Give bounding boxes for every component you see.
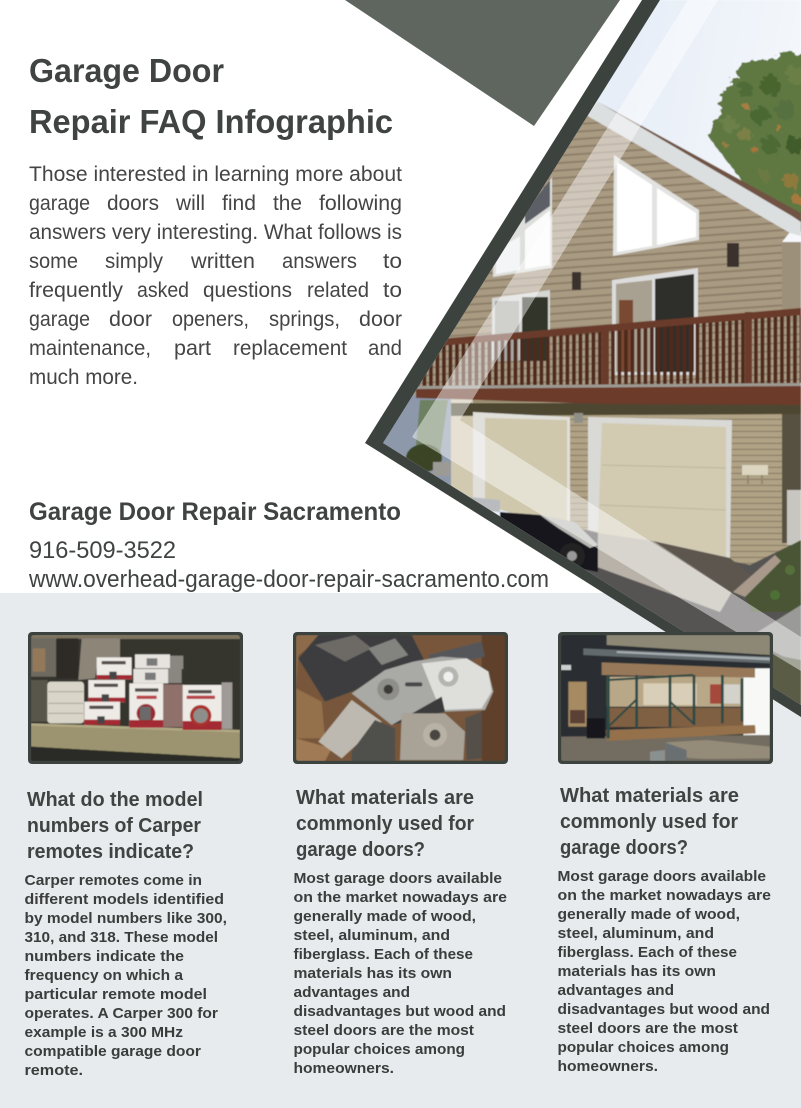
column 3 text: Most garage doors available <box>558 868 766 885</box>
column 3 text: advantages and <box>558 982 674 999</box>
column 3 text: on the market nowadays are <box>558 887 771 904</box>
intro paragraph: related <box>307 279 369 302</box>
column 2 text: generally made of wood, <box>294 908 476 925</box>
column 3 text: popular choices among <box>558 1039 729 1056</box>
contact block <box>28 498 549 593</box>
column 2 text: materials has its own <box>294 965 452 982</box>
intro paragraph: much more. <box>29 366 138 389</box>
large gable window <box>613 155 699 256</box>
intro paragraph: questions <box>203 279 292 302</box>
column 2 text: homeowners. <box>294 1060 394 1077</box>
column 1 heading: remotes indicate? <box>27 841 194 863</box>
column 2 text: disadvantages but wood and <box>294 1003 506 1020</box>
roof <box>598 102 801 224</box>
retaining wall and plants <box>745 540 801 612</box>
column 1 text: 310, and 318. These model <box>24 929 218 946</box>
column 1 text: numbers indicate the <box>24 948 184 965</box>
intro paragraph: to <box>383 279 402 302</box>
column 3 text: steel doors are the most <box>558 1020 738 1037</box>
light diagonal stripes <box>412 0 801 671</box>
left garage door <box>473 412 570 530</box>
upper left window <box>493 177 552 277</box>
intro paragraph: the <box>273 192 302 215</box>
intro paragraph: door <box>359 308 402 331</box>
column 2 text: Most garage doors available <box>294 870 502 887</box>
column 2 text <box>294 870 507 1077</box>
intro paragraph: some <box>29 250 78 273</box>
page background: grey lower section <box>0 593 801 1108</box>
column 3 text: steel, aluminum, and <box>558 925 714 942</box>
lower wall <box>449 400 790 566</box>
top grey triangle <box>345 0 620 126</box>
right garage door <box>588 417 732 558</box>
intro paragraph: following <box>319 192 402 215</box>
column 2 text: fiberglass. Each of these <box>294 946 473 963</box>
intro paragraph: asked <box>137 279 189 302</box>
contact block: www.overhead-garage-door-repair-sacramento.com <box>28 566 549 593</box>
intro paragraph: springs, <box>269 308 340 331</box>
lower left sliding door <box>492 290 550 360</box>
column 3 text: fiberglass. Each of these <box>558 944 737 961</box>
column 1 text: operates. A Carper 300 for <box>24 1005 218 1022</box>
column 2 heading: garage doors? <box>296 839 425 861</box>
deck beam <box>416 383 801 405</box>
intro paragraph: simply <box>105 250 163 273</box>
column 2 heading <box>296 787 474 861</box>
column 3 heading: What materials are <box>560 785 739 807</box>
column 2 text: advantages and <box>294 984 410 1001</box>
title <box>29 52 393 140</box>
upper siding <box>413 116 800 396</box>
column 1 text: remote. <box>24 1062 83 1079</box>
column 2 text: popular choices among <box>294 1041 465 1058</box>
column 3 text: disadvantages but wood and <box>558 1001 770 1018</box>
column 1 text: by model numbers like 300, <box>24 910 227 927</box>
column 3 text: generally made of wood, <box>558 906 740 923</box>
intro paragraph: Those interested in learning more about <box>29 163 402 186</box>
intro paragraph: replacement <box>233 337 347 360</box>
title: Repair FAQ Infographic <box>29 103 393 140</box>
column 1 text: Carper remotes come in <box>24 872 202 889</box>
column 3 text <box>558 868 771 1075</box>
deck railing <box>416 312 801 388</box>
intro paragraph: openers, <box>172 308 249 331</box>
intro paragraph: and <box>368 337 402 360</box>
title: Garage Door <box>29 52 224 89</box>
intro paragraph: part <box>174 337 211 360</box>
column 1 text: particular remote model <box>24 986 207 1003</box>
contact block: Garage Door Repair Sacramento <box>29 498 401 526</box>
intro paragraph: written <box>190 250 255 273</box>
image card: lumber racks in warehouse <box>558 632 773 764</box>
column 3 heading: commonly used for <box>560 811 738 833</box>
dark angled frame band <box>365 0 801 717</box>
image card: remote boxes on shelf <box>28 632 243 764</box>
column 1 text: different models identified <box>24 891 224 908</box>
intro paragraph: door <box>109 308 152 331</box>
column 3 heading: garage doors? <box>560 837 688 859</box>
wall light and mailbox <box>574 413 583 423</box>
intro paragraph: doors <box>107 192 159 215</box>
intro paragraph: maintenance, <box>29 337 151 360</box>
column 2 heading: What materials are <box>296 787 474 809</box>
intro paragraph: answers very interesting. What follows is <box>29 221 402 244</box>
column 2 text: steel, aluminum, and <box>294 927 450 944</box>
house photo in angled frame <box>370 0 801 720</box>
column 3 heading <box>560 785 739 859</box>
column 1 text: compatible garage door <box>24 1043 201 1060</box>
contact block: 916-509-3522 <box>29 537 176 564</box>
column 3 text: homeowners. <box>558 1058 658 1075</box>
column 1 text <box>24 872 227 1079</box>
car <box>500 512 598 572</box>
column 3 text: materials has its own <box>558 963 716 980</box>
driveway <box>597 533 733 612</box>
intro paragraph: garage <box>29 192 90 215</box>
lower right sliding door <box>612 268 698 375</box>
wall lights <box>572 272 581 290</box>
column 1 text: example is a 300 MHz <box>24 1024 183 1041</box>
column 2 heading: commonly used for <box>296 813 474 835</box>
intro paragraph: will <box>175 192 205 215</box>
column 1 heading <box>27 789 203 863</box>
column 1 heading: What do the model <box>27 789 203 811</box>
tree <box>707 52 801 240</box>
ground base <box>582 528 801 705</box>
intro paragraph: frequently <box>29 279 123 302</box>
intro paragraph: to <box>383 250 402 273</box>
column 1 heading: numbers of Carper <box>27 815 201 837</box>
intro paragraph: garage <box>29 308 90 331</box>
intro paragraph: answers <box>282 250 357 273</box>
intro paragraph <box>29 163 402 389</box>
column 1 text: frequency on which a <box>24 967 184 984</box>
column 2 text: steel doors are the most <box>294 1022 474 1039</box>
image card: metal brackets in a box <box>293 632 508 764</box>
intro paragraph: find <box>222 192 256 215</box>
column 2 text: on the market nowadays are <box>294 889 507 906</box>
